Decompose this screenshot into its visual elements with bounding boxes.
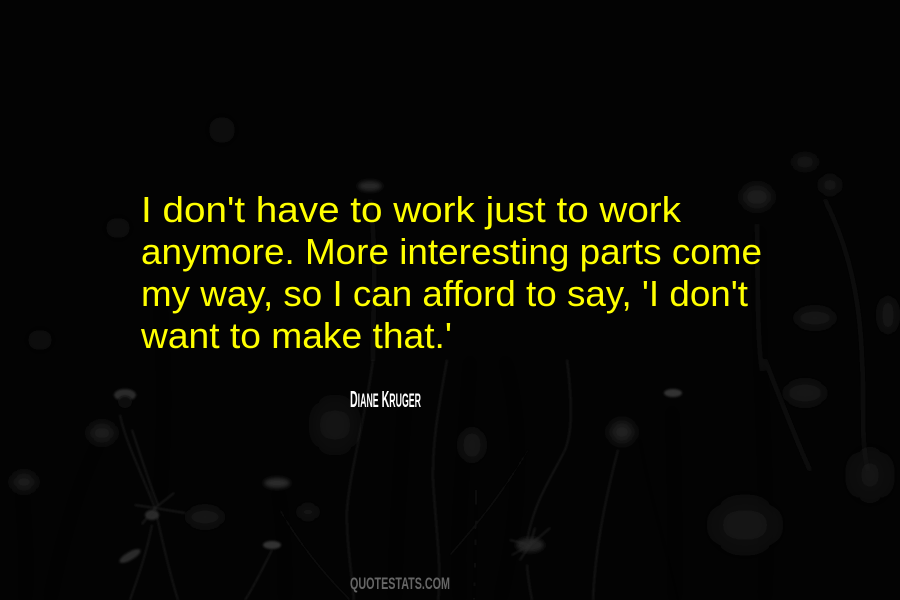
site watermark: QUOTESTATS.COM [350,574,450,593]
quote text: want to make that.' [140,315,452,356]
burst flower spikes [135,493,550,560]
quote text: anymore. More interesting parts come [141,231,762,272]
quote text [140,189,762,356]
background: dark flower stems photograph [12,117,897,600]
quote text: my way, so I can afford to say, 'I don't [141,273,748,314]
quote text: I don't have to work just to work [141,189,682,230]
author name: DIANE KRUGER [350,386,421,412]
flower heads [12,117,897,565]
visible thin stems [120,360,618,600]
faint wide stems [22,230,766,600]
